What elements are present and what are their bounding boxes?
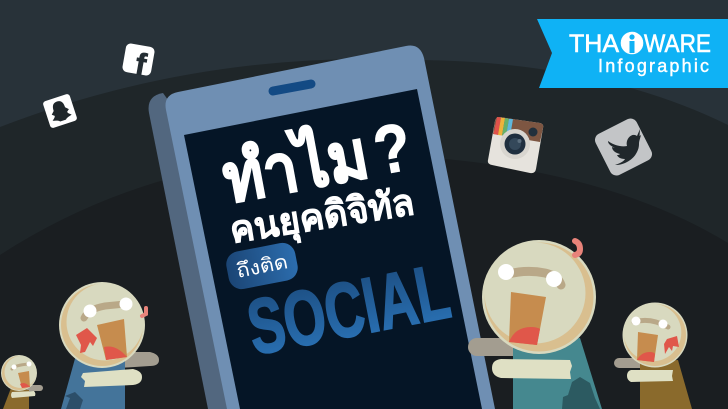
zombie: large right [468, 240, 602, 409]
icon: facebook [120, 43, 155, 84]
head [622, 302, 688, 368]
subheadline: คนยุคดิจิทัล [227, 181, 417, 254]
body [640, 360, 692, 409]
head [482, 240, 596, 354]
zombie: small right [614, 302, 692, 409]
back arm [118, 352, 159, 368]
phone body [166, 46, 495, 409]
body [61, 355, 125, 409]
zombie: small left [1, 355, 43, 409]
icon: snapchat [42, 93, 78, 129]
SOCIAL wordmark: SOCIAL [240, 247, 457, 372]
zombie: large left [59, 282, 159, 409]
screen [184, 89, 482, 409]
head [1, 355, 37, 391]
body [513, 338, 602, 409]
camera lens [500, 129, 530, 159]
icon: twitter [593, 116, 654, 178]
body [3, 388, 29, 409]
front arm [11, 391, 35, 398]
phone side [149, 93, 240, 409]
icon: instagram [488, 117, 543, 173]
icon: facebook: f [133, 46, 150, 83]
front arm [492, 359, 572, 379]
banner title: THA [569, 30, 619, 58]
phone [149, 46, 495, 409]
torn patch [562, 377, 600, 409]
front arm [81, 369, 142, 387]
worm [575, 241, 580, 255]
worm [142, 308, 146, 316]
headline: ? [368, 108, 417, 190]
front arm [627, 370, 673, 382]
back arm [468, 338, 528, 356]
banner title [569, 30, 711, 58]
banner title: WARE [644, 30, 711, 58]
banner: Thaiware Infographic [537, 19, 728, 88]
back arm [614, 358, 646, 368]
banner subtitle: Infographic [598, 56, 709, 76]
pill label: ถึงติด [235, 251, 290, 283]
speaker [273, 84, 311, 91]
pill label [224, 241, 300, 291]
back arm [26, 385, 43, 391]
head [59, 282, 145, 368]
torn patch [65, 392, 83, 409]
rainbow stripes [494, 117, 513, 136]
headline: ทำไม [217, 114, 374, 218]
